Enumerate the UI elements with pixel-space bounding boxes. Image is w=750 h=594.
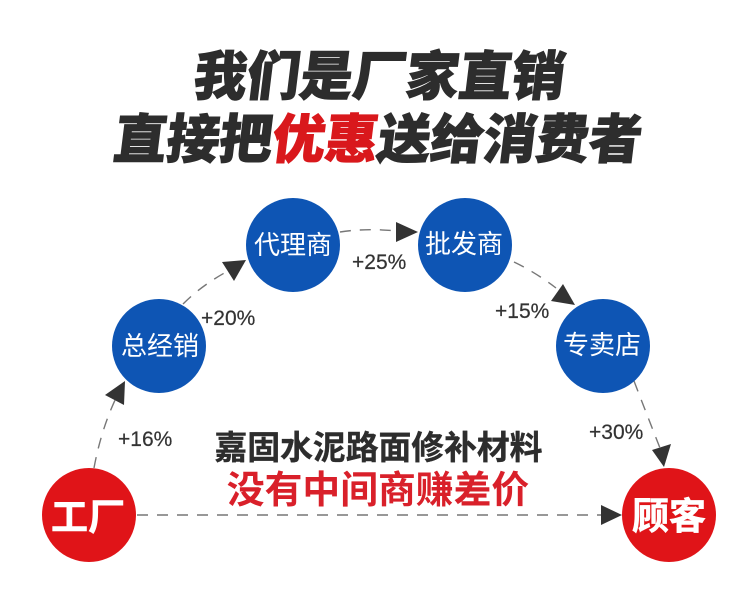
label: +25%: +25% [352, 251, 406, 274]
arrow: agent to wholesaler [340, 222, 418, 242]
node: 顾客 [622, 468, 716, 562]
node: 工厂: 工厂 [51, 487, 125, 541]
node: 工厂 [42, 468, 136, 562]
node: 批发商 [418, 198, 512, 292]
label: +20%: +20% [201, 307, 255, 330]
subtitle: 嘉固水泥路面修补材料 [215, 422, 543, 469]
label: +30%: +30% [589, 421, 643, 444]
arrow: factory to customer direct [137, 505, 622, 525]
node: 专卖店: 专卖店 [563, 325, 641, 362]
label: +16%: +16% [118, 428, 172, 451]
title [110, 34, 647, 174]
arrow: specialty store to customer [634, 381, 671, 467]
node: 代理商: 代理商 [254, 225, 332, 262]
arrow: factory to general distributor [94, 381, 125, 468]
node: 批发商: 批发商 [425, 224, 503, 261]
arrow: general distributor to agent [183, 260, 246, 304]
title line 1: 我们是厂家直销 [190, 34, 570, 111]
label: +15%: +15% [495, 300, 549, 323]
node: 代理商 [246, 198, 340, 292]
title line 2: 直接把优惠送给消费者 [110, 97, 647, 174]
arrow: wholesaler to specialty store [514, 262, 575, 305]
node: 总经销 [112, 299, 206, 393]
node: 专卖店 [556, 299, 650, 393]
node: 顾客: 顾客 [632, 486, 706, 540]
node: 总经销: 总经销 [121, 326, 199, 363]
red subheading: 没有中间商赚差价 [227, 459, 529, 514]
